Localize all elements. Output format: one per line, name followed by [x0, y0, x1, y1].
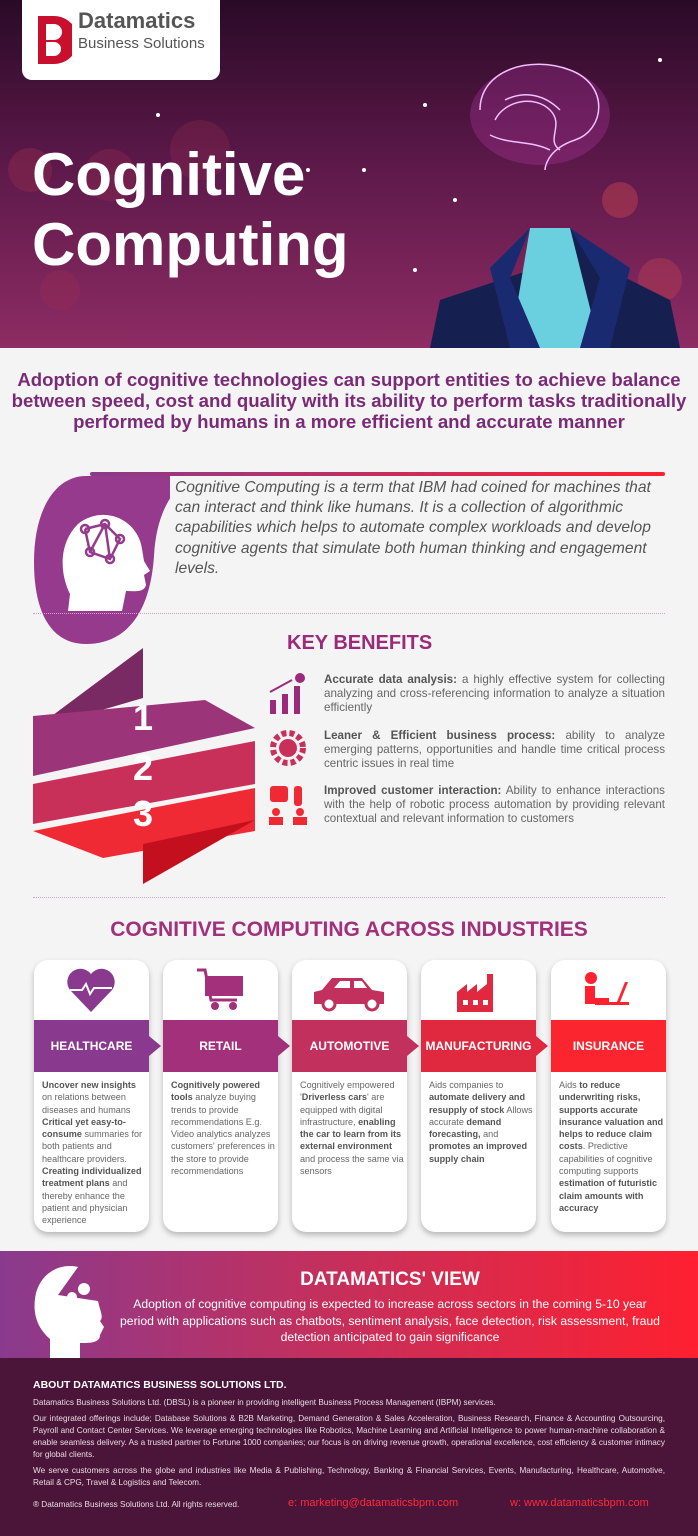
card: retail — [163, 960, 278, 1232]
view text: Adoption of cognitive computing is expected to increase across sectors in the coming 5-10 year period with applications such as chatbots, sentiment analysis, face detection, risk assessment, fraud detection anticipated to gain significance — [120, 1297, 660, 1344]
logo text: Datamatics — [78, 8, 195, 33]
footer: about — [0, 1358, 698, 1536]
icon: factory — [457, 974, 493, 1012]
benefit 2: Leaner & Efficient business process: ability to analyze emerging patterns, opportunities and handle time critical process centric issues in real time — [324, 729, 665, 770]
card: automotive: AUTOMOTIVE — [310, 1039, 389, 1053]
about text — [33, 1398, 665, 1487]
card: automotive: Cognitively empowered 'Driverless cars' are equipped with digital infrastructure, enabling the car to learn from its external environment and process the same via sensors — [300, 1080, 404, 1176]
definition text: Cognitive Computing is a term that IBM had coined for machines that can interact and think like humans. It is a collection of algorithmic capabilities which helps to automate complex workloads and develop cognitive agents that simulate both human thinking and engagement levels. — [175, 479, 651, 577]
subtitle: Adoption of cognitive technologies can support entities to achieve balance — [17, 369, 681, 390]
ribbon graphic 1-2-3: 3 — [133, 793, 153, 834]
logo text — [78, 8, 205, 52]
icon: gear — [270, 730, 306, 766]
icon: people — [269, 786, 307, 825]
panel: datamatics view — [0, 1251, 698, 1358]
card: retail: Cognitively powered tools analyze buying trends to provide recommendations E.g. Video analytics analyzes customers' preferences in the store to provide recommendations — [171, 1080, 275, 1176]
logo text: Business Solutions — [78, 35, 205, 52]
decorative bokeh — [8, 58, 682, 304]
card: insurance: Aids to reduce underwriting risks, supports accurate insurance valuation and helps to reduce claim costs. Predictive capabilities of cognitive computing supports estimation of futuristic claim amounts with accuracy — [559, 1080, 663, 1213]
heading: industries: COGNITIVE COMPUTING ACROSS INDUSTRIES — [110, 918, 588, 941]
card: healthcare: Uncover new insights on relations between diseases and humans Critical yet easy-to-consume summaries for both patients and healthcare providers. Creating individualized treatment plans and thereby enhance the patient and physician experience — [42, 1080, 142, 1225]
icon: cart — [197, 968, 243, 1010]
icon: car — [314, 978, 384, 1012]
about heading: ABOUT DATAMATICS BUSINESS SOLUTIONS LTD. — [33, 1379, 287, 1391]
card: manufacturing: MANUFACTURING — [426, 1039, 532, 1053]
icon: person at laptop — [585, 972, 629, 1005]
card: insurance — [551, 960, 666, 1232]
icon: heart — [67, 968, 115, 1012]
card: retail: RETAIL — [199, 1039, 242, 1053]
card: insurance: INSURANCE — [573, 1039, 644, 1053]
red top line — [90, 472, 665, 476]
subtitle: performed by humans in a more efficient and accurate manner — [73, 411, 625, 432]
view heading: DATAMATICS' VIEW — [300, 1269, 480, 1290]
icon: DB logo — [38, 16, 72, 64]
panel: definition — [34, 472, 665, 644]
benefit 1: Accurate data analysis: a highly effective system for collecting analyzing and cross-referencing information to analyze a situation efficiently — [324, 673, 665, 714]
subtitle — [12, 369, 686, 432]
card: automotive — [292, 960, 407, 1232]
title: Cognitive — [32, 141, 305, 208]
logo box — [22, 0, 220, 80]
benefit 3: Improved customer interaction: Ability to enhance interactions with the help of robotic process automation by providing relevant contextual and relevant information to customers — [324, 784, 665, 825]
icon: chart — [270, 673, 305, 714]
title — [32, 141, 349, 278]
illustration: brain and suit — [430, 64, 680, 348]
card: manufacturing — [421, 960, 536, 1232]
ribbon graphic 1-2-3: 1 — [133, 697, 153, 738]
card: healthcare: HEALTHCARE — [51, 1039, 132, 1053]
copyright: ® Datamatics Business Solutions Ltd. All rights reserved. — [33, 1500, 239, 1509]
subtitle: between speed, cost and quality with its ability to perform tasks traditionally — [12, 390, 686, 411]
ribbon graphic 1-2-3 — [33, 648, 255, 884]
about text: Our integrated offerings include; Database Solutions & B2B Marketing, Demand Generation & Sales Acceleration, Business Research, Finance & Accounting Outsourcing, Payroll and Contact Center Services. We leverage emerging technologies like Robotics, Machine Learning and Artificial Intelligence to power human-machine collaboration & enable seamless delivery. As a trusted partner to Fortune 1000 companies; our focus is on driving revenue growth, operational excellence, cost efficiency & customer intimacy for global clients. — [33, 1414, 665, 1459]
card: manufacturing: Aids companies to automate delivery and resupply of stock Allows accurate demand forecasting, and promotes an improved supply chain — [429, 1080, 533, 1164]
heading: key benefits: KEY BENEFITS — [287, 632, 432, 654]
card: healthcare — [34, 960, 149, 1232]
title: Computing — [32, 211, 349, 278]
about text: Datamatics Business Solutions Ltd. (DBSL) is a pioneer in providing intelligent Business Process Management (IBPM) services. — [33, 1398, 496, 1407]
email: e: marketing@datamaticsbpm.com — [288, 1497, 458, 1509]
icon: head with gears — [34, 1266, 104, 1358]
hero banner — [0, 0, 698, 348]
website: w: www.datamaticsbpm.com — [510, 1497, 649, 1509]
icon: head with network — [34, 476, 170, 644]
about text: We serve customers across the globe and industries like Media & Publishing, Technology, Banking & Financial Services, Events, Manufacturing, Healthcare, Automotive, Retail & CPG, Travel & Logistics and Telecom. — [33, 1466, 665, 1487]
ribbon graphic 1-2-3: 2 — [133, 747, 153, 788]
